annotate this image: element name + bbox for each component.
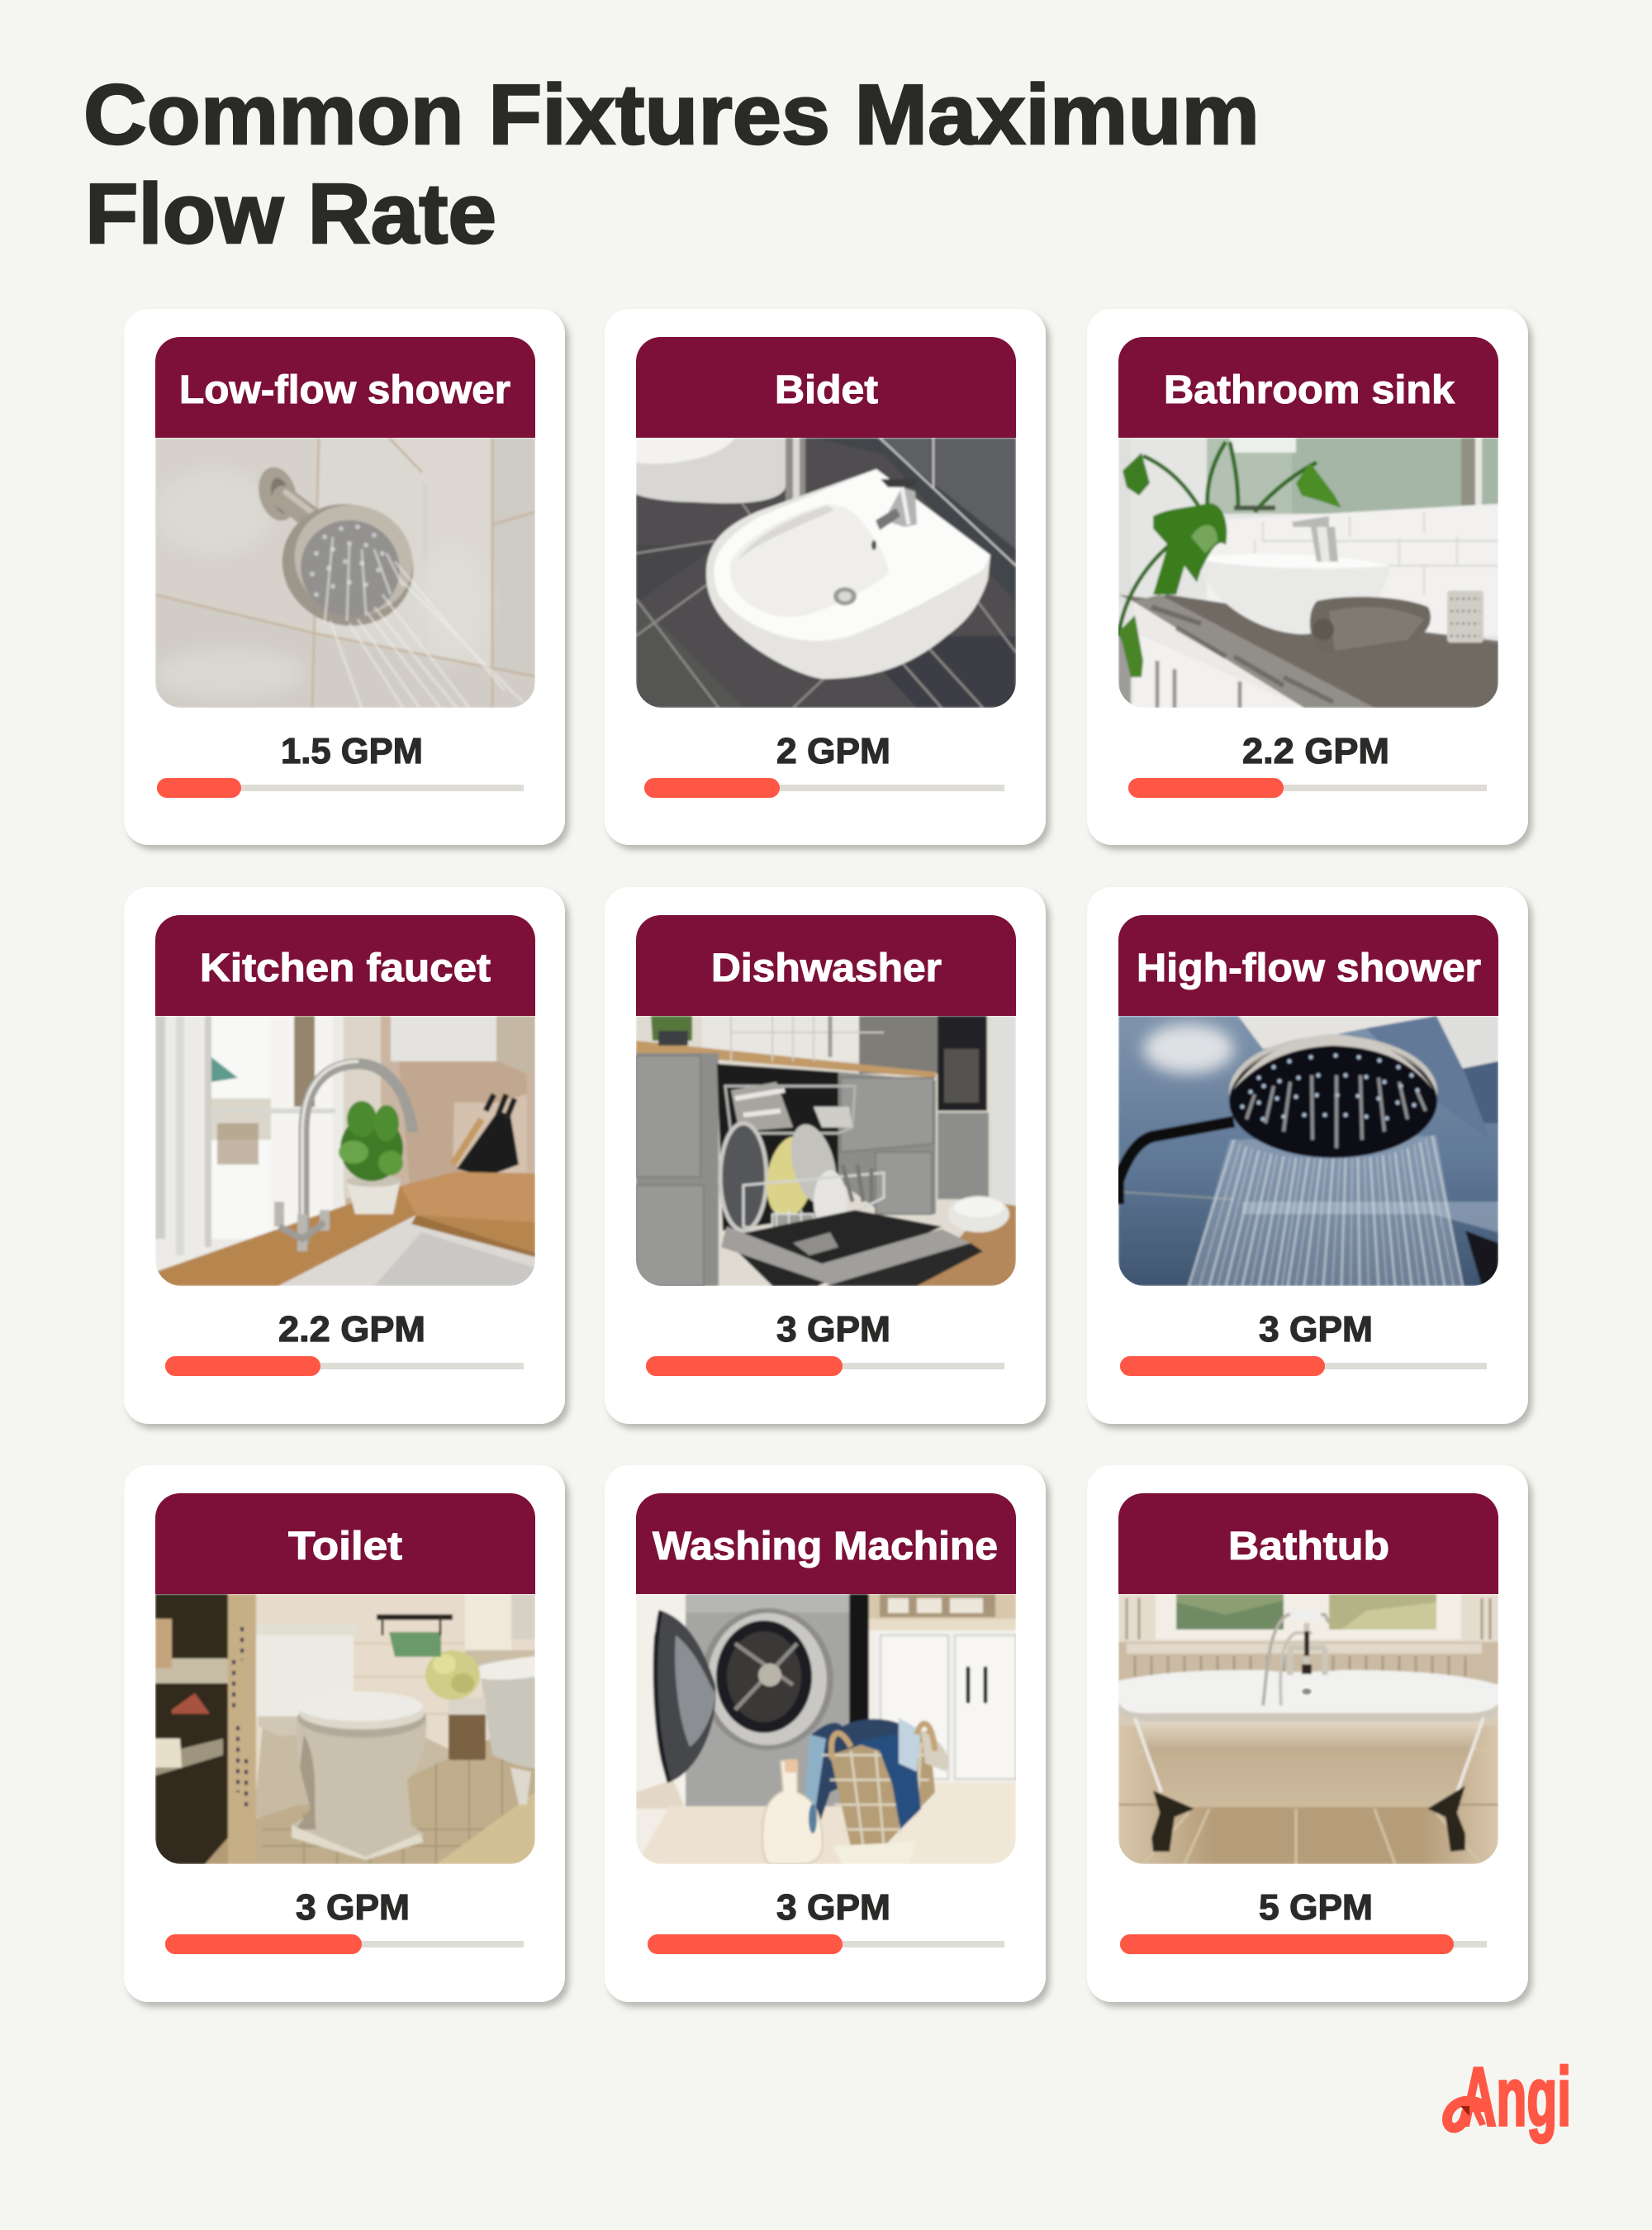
flow bar: 3 GPM [1120,1356,1487,1376]
panel: high-flow shower [1087,887,1528,1424]
heading: washing machine [636,1493,1016,1594]
photo: bidet [636,438,1016,708]
heading: dishwasher: Dishwasher [711,947,942,990]
title: Common Fixtures Maximum [83,67,1260,162]
flow bar: 2 GPM [644,778,1004,798]
panel: dishwasher [605,887,1046,1424]
photo: open dishwasher [636,1016,1016,1286]
heading: bidet: Bidet [775,368,878,412]
panel: low-flow shower [124,309,565,845]
heading: bathroom sink: Bathroom sink [1164,368,1455,412]
flow value: 5 GPM: 5 GPM [1259,1887,1373,1928]
flow bar: 1.5 GPM [157,778,524,798]
heading: toilet [155,1493,535,1594]
heading: low-flow shower [155,337,535,438]
photo: vessel sink with plant [1118,438,1498,708]
photo: toilet in rustic bathroom [155,1594,535,1864]
flow value: 3 GPM: 3 GPM [776,1887,890,1928]
panel: kitchen faucet [124,887,565,1424]
title [83,67,1260,261]
heading: high-flow shower: High-flow shower [1137,947,1481,990]
flow value: 2.2 GPM: 2.2 GPM [278,1309,425,1350]
flow bar: 3 GPM [648,1934,1004,1954]
flow value: 3 GPM: 3 GPM [776,1309,890,1350]
flow bar: 5 GPM [1120,1934,1487,1954]
panel: bidet [605,309,1046,845]
panel: bathroom sink [1087,309,1528,845]
photo: front-load washer and laundry basket [636,1594,1016,1864]
title: Flow Rate [85,166,496,261]
panel: toilet [124,1465,565,2002]
heading: washing machine: Washing Machine [653,1525,998,1568]
panel: washing machine [605,1465,1046,2002]
photo: wall shower head [155,438,535,708]
logo: Angi [1447,2051,1571,2143]
logo: Angi: Angi [1460,2051,1571,2143]
panel: bathtub [1087,1465,1528,2002]
flow bar: 3 GPM [646,1356,1004,1376]
photo: rain shower head [1118,1016,1498,1286]
flow value: 2.2 GPM: 2.2 GPM [1242,731,1389,771]
flow value: 3 GPM: 3 GPM [1259,1309,1373,1350]
flow value: 3 GPM: 3 GPM [296,1887,410,1928]
heading: toilet: Toilet [288,1525,402,1568]
heading: bathroom sink [1118,337,1498,438]
heading: high-flow shower [1118,915,1498,1016]
heading: kitchen faucet: Kitchen faucet [200,947,491,990]
heading: kitchen faucet [155,915,535,1016]
flow value: 1.5 GPM: 1.5 GPM [281,731,423,771]
flow bar: 2.2 GPM [1128,778,1487,798]
heading: low-flow shower: Low-flow shower [179,368,510,412]
flow bar: 3 GPM [165,1934,524,1954]
heading: bathtub: Bathtub [1228,1525,1389,1568]
heading: bidet [636,337,1016,438]
flow bar: 2.2 GPM [165,1356,524,1376]
heading: dishwasher [636,915,1016,1016]
heading: bathtub [1118,1493,1498,1594]
flow value: 2 GPM: 2 GPM [776,731,890,771]
photo: kitchen faucet by window [155,1016,535,1286]
photo: clawfoot bathtub [1118,1594,1498,1864]
